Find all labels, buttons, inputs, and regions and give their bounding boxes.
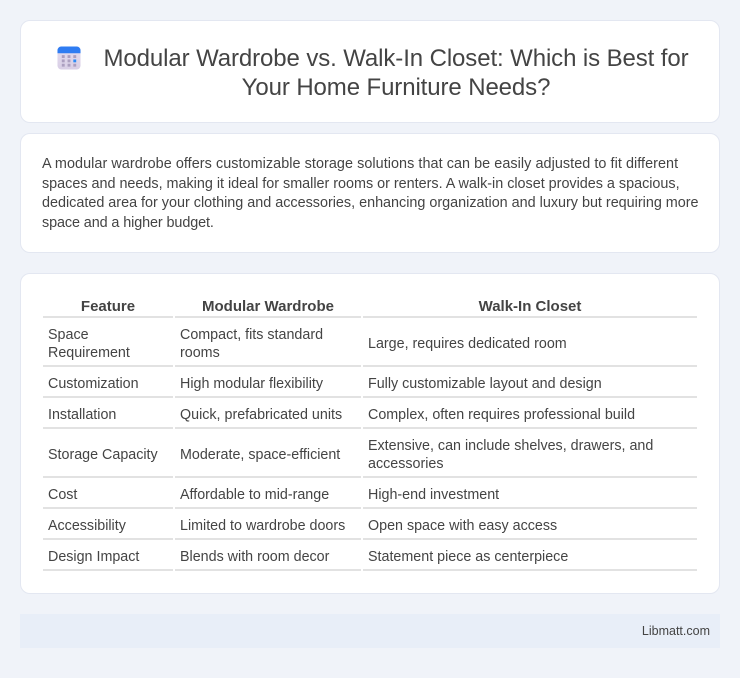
comparison table: High modular flexibility: [180, 376, 323, 392]
comparison table: Compact, fits standard rooms: [180, 326, 323, 360]
icon: calendar: [57, 46, 81, 70]
text block: introduction: dedicated area for your clothing and accessories, enhancing organization and luxury but requiring more: [42, 195, 699, 211]
comparison table: Moderate, space-efficient: [180, 446, 340, 462]
comparison table: Customization: [48, 376, 139, 392]
footer credit: Libmatt.com: [642, 624, 710, 638]
panel: comparison table: [20, 273, 720, 594]
text block: introduction: spaces and needs, making it ideal for smaller rooms or renters. A walk-in closet provides a spacious,: [42, 176, 680, 192]
comparison table: Quick, prefabricated units: [180, 406, 342, 422]
text block: introduction: space and a higher budget.: [42, 214, 214, 230]
comparison table: Space Requirement: [48, 326, 130, 360]
title: Modular Wardrobe vs. Walk-In Closet: Which is Best for: [104, 45, 688, 72]
comparison table: Installation: [48, 406, 116, 422]
comparison table: Design Impact: [48, 548, 139, 564]
comparison table: Accessibility: [48, 518, 126, 534]
comparison table: Storage Capacity: [48, 446, 158, 462]
comparison table: Walk-In Closet: [479, 298, 581, 314]
comparison table: Extensive, can include shelves, drawers, and accessories: [368, 438, 653, 472]
panel: introduction: [20, 133, 720, 253]
comparison table: Statement piece as centerpiece: [368, 548, 568, 564]
comparison table: Blends with room decor: [180, 548, 329, 564]
title: [104, 45, 688, 101]
comparison table: Cost: [48, 486, 77, 502]
comparison table: Complex, often requires professional build: [368, 406, 635, 422]
title: Your Home Furniture Needs?: [242, 74, 550, 101]
comparison table: Affordable to mid-range: [180, 486, 329, 502]
comparison table: Open space with easy access: [368, 518, 557, 534]
comparison table: High-end investment: [368, 486, 499, 502]
comparison table: Fully customizable layout and design: [368, 376, 602, 392]
comparison table: Limited to wardrobe doors: [180, 518, 345, 534]
panel: title card: [20, 20, 720, 123]
footer: [20, 614, 720, 648]
comparison table: Large, requires dedicated room: [368, 336, 567, 352]
comparison table: [43, 298, 697, 571]
comparison table: Feature: [81, 298, 135, 314]
comparison table: Modular Wardrobe: [202, 298, 334, 314]
text block: introduction: A modular wardrobe offers customizable storage solutions that can be easily adjusted to fit different: [42, 156, 678, 172]
text block: introduction: [42, 156, 699, 230]
